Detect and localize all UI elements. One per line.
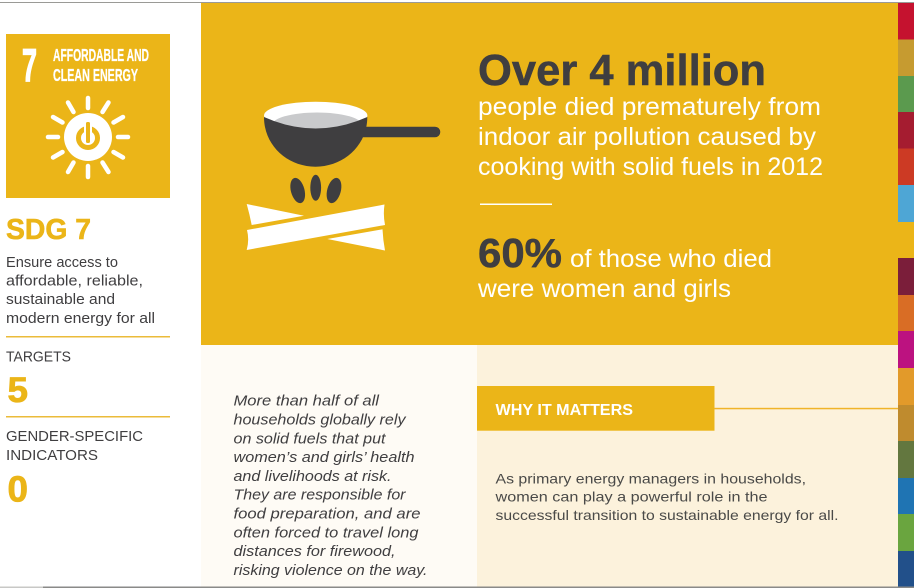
text: why it matters body: As primary energy managers in households,	[496, 470, 806, 486]
stat: gender-specific indicators	[6, 428, 143, 510]
heading: why it matters	[477, 386, 898, 431]
icon: pan over fire	[247, 102, 440, 250]
text: deaths statement	[478, 93, 823, 181]
text: italic quote: food preparation, and are	[234, 506, 420, 522]
stat: targets	[6, 348, 71, 410]
stat: 60 percent: of those who died	[570, 245, 772, 273]
stat: targets: TARGETS	[6, 348, 71, 366]
text: why it matters body: successful transition to sustainable energy for all.	[496, 507, 838, 523]
text: goal description	[6, 255, 155, 327]
text: goal description: sustainable and	[6, 292, 115, 308]
text: italic quote: on solid fuels that put	[234, 431, 387, 447]
pan interior	[272, 112, 362, 138]
stat: gender-specific indicators: 0	[8, 468, 28, 510]
badge title	[53, 45, 149, 85]
headline: Over 4 million: Over 4 million	[478, 46, 766, 95]
text: italic quote	[234, 394, 428, 579]
text: italic quote: They are responsible for	[234, 488, 407, 504]
stat: 60 percent: 60%	[478, 230, 562, 276]
panel: quote background	[201, 345, 477, 586]
text: goal description: affordable, reliable,	[6, 274, 143, 290]
text: italic quote: risking violence on the way.	[234, 563, 428, 579]
stat: targets: 5	[8, 371, 28, 410]
text: why it matters body: women can play a powerful role in the	[494, 489, 768, 505]
text: italic quote: and livelihoods at risk.	[234, 469, 392, 485]
pan handle	[355, 127, 440, 137]
text: italic quote: More than half of all	[234, 394, 380, 410]
stat: gender-specific indicators: INDICATORS	[6, 447, 98, 464]
text: italic quote: often forced to travel long	[234, 525, 418, 541]
pan bowl	[264, 117, 367, 167]
panel: SDG colour strip	[898, 3, 914, 586]
panel: why it matters background	[477, 345, 898, 586]
panel: hero yellow banner	[201, 3, 898, 345]
text: deaths statement: cooking with solid fuels in 2012	[478, 153, 823, 181]
text: italic quote: distances for firewood,	[234, 544, 396, 560]
text: italic quote: households globally rely	[234, 412, 406, 428]
heading: SDG 7: SDG 7	[6, 214, 91, 246]
text: deaths statement: people died prematurely from	[478, 93, 821, 121]
text: deaths statement: indoor air pollution caused by	[478, 123, 817, 151]
badge title: CLEAN ENERGY	[53, 65, 138, 85]
pan rim	[264, 102, 367, 129]
text: goal description: modern energy for all	[6, 311, 155, 327]
stat: gender-specific indicators: GENDER-SPECIFIC	[6, 428, 143, 445]
badge number: 7	[22, 39, 37, 91]
flames	[288, 176, 308, 205]
panel: SDG 7 badge	[6, 34, 170, 198]
icon: sun with power symbol	[48, 98, 128, 177]
badge title: AFFORDABLE AND	[53, 45, 149, 65]
text: why it matters body	[494, 470, 838, 523]
stat: 60 percent	[477, 230, 772, 303]
heading: why it matters: WHY IT MATTERS	[496, 402, 633, 419]
stat: 60 percent: were women and girls	[477, 275, 731, 303]
text: italic quote: women’s and girls’ health	[234, 450, 414, 466]
text: goal description: Ensure access to	[6, 255, 118, 271]
firewood logs	[247, 204, 304, 225]
